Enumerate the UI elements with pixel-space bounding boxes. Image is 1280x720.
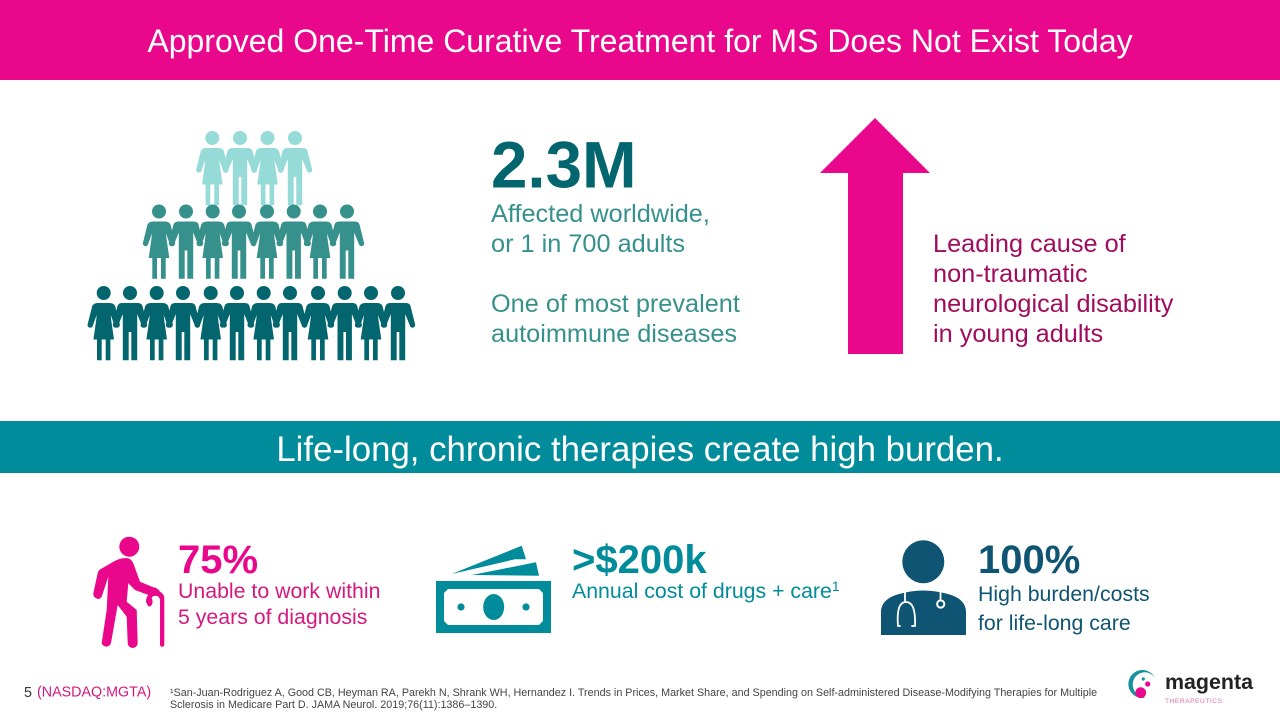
text: leading cause: neurological disability — [933, 290, 1174, 318]
statistic: >$200k — [572, 538, 840, 603]
ticker: (NASDAQ:MGTA) — [37, 684, 151, 700]
page number: 5 — [24, 685, 32, 701]
footnote: Sclerosis in Medicare Part D. JAMA Neurol. 2019;76(11):1386–1390. — [170, 699, 497, 711]
text: leading cause: in young adults — [933, 320, 1103, 348]
logo: magenta therapeutics: magenta — [1165, 670, 1254, 694]
middle row of people — [143, 204, 364, 279]
footnote — [170, 687, 1097, 711]
footnote: ¹San-Juan-Rodriguez A, Good CB, Heyman RA, Parekh N, Shrank WH, Hernandez I. Trends in Prices, Market Share, and Spending on Self-administered Disease-Modifying Therapies for Multiple — [170, 687, 1097, 699]
statistic: 100%: High burden/costs — [978, 582, 1150, 606]
statistic: 75%: 75% — [178, 538, 258, 582]
statistic: 2.3M affected — [491, 128, 710, 258]
people pyramid icon — [88, 131, 415, 360]
text: leading cause: Leading cause of — [933, 230, 1127, 258]
statistic: >$200k: >$200k — [572, 538, 707, 582]
logo: magenta therapeutics — [1128, 670, 1254, 705]
statistic: >$200k: Annual cost of drugs + care — [572, 579, 832, 603]
text: prevalence: autoimmune diseases — [491, 320, 737, 348]
icon: banknotes — [436, 546, 551, 633]
statistic: >$200k: 1 — [832, 578, 840, 594]
icon: elderly person with cane — [93, 537, 164, 648]
text: prevalence: One of most prevalent — [491, 290, 740, 318]
icon: up arrow — [820, 118, 930, 354]
logo: magenta therapeutics: THERAPEUTICS — [1165, 698, 1223, 705]
title banner — [0, 0, 1280, 80]
icon: doctor with stethoscope — [881, 540, 966, 635]
top row of people — [196, 131, 312, 205]
title banner: Approved One-Time Curative Treatment for MS Does Not Exist Today — [147, 23, 1133, 59]
statistic: 100%: for life-long care — [978, 611, 1131, 635]
bottom row of people — [88, 286, 415, 360]
statistic: 75%: Unable to work within — [178, 579, 380, 603]
text: leading cause — [933, 230, 1174, 348]
statistic: 75%: 5 years of diagnosis — [178, 605, 367, 629]
section banner: Life-long, chronic therapies create high burden. — [276, 430, 1004, 469]
section banner — [0, 421, 1280, 473]
statistic: 2.3M affected: or 1 in 700 adults — [491, 230, 685, 258]
text: prevalence — [491, 290, 740, 348]
statistic: 2.3M affected: 2.3M — [491, 128, 637, 202]
statistic: 100%: 100% — [978, 538, 1080, 582]
text: leading cause: non-traumatic — [933, 260, 1088, 288]
statistic: 100% — [978, 538, 1150, 635]
statistic: 75% — [178, 538, 380, 629]
statistic: 2.3M affected: Affected worldwide, — [491, 200, 710, 228]
